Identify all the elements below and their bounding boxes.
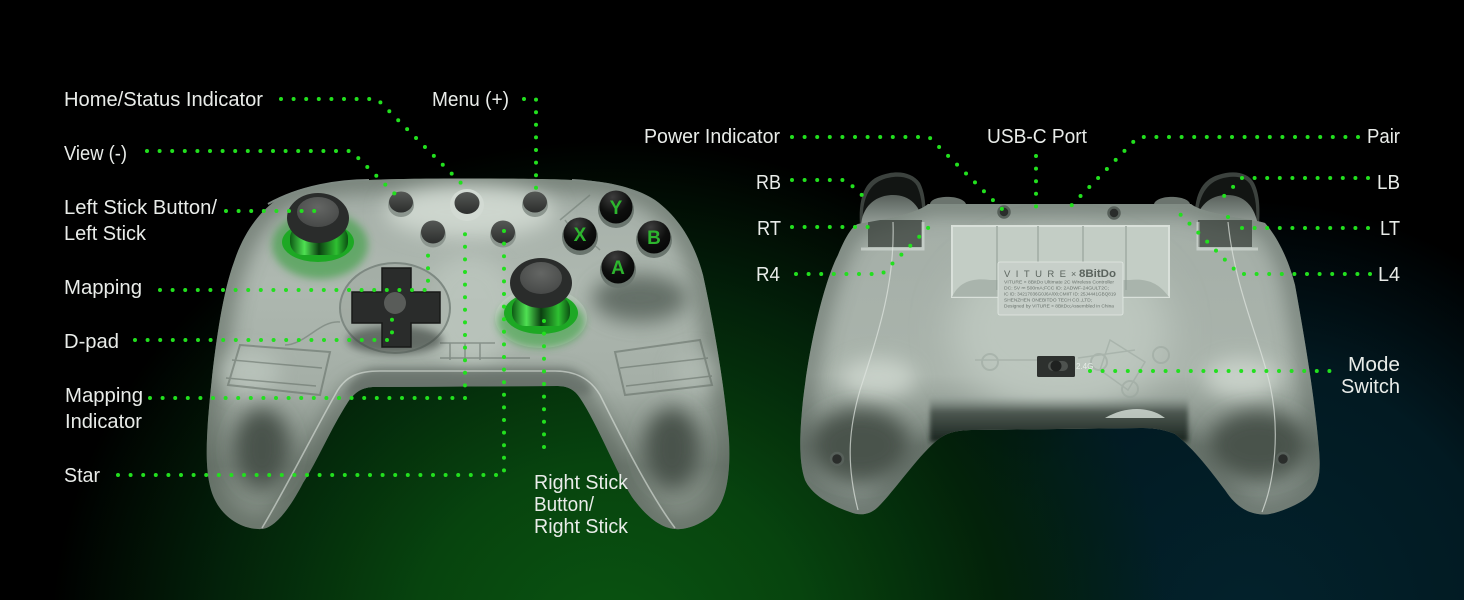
left trigger and bumper [860, 172, 966, 226]
product label: DC: 5V ⎓ 500mA;FCC ID: 2ADWF-24GULT2C; [1004, 286, 1109, 290]
A button [600, 250, 636, 288]
callout: D-pad: D-pad [64, 331, 119, 353]
callout: D-pad [64, 319, 392, 353]
callout: Mapping: Mapping [64, 277, 142, 299]
back view controller [800, 172, 1320, 515]
star button [490, 220, 516, 248]
callout: Mapping Indicator: Indicator [65, 411, 142, 433]
callout: Mapping [64, 246, 428, 299]
callout: USB-C Port: USB-C Port [987, 126, 1087, 148]
callout: Left Stick Button / Left Stick [64, 197, 318, 245]
Y button: Y [610, 198, 623, 219]
mode switch: 2.4G [1076, 362, 1093, 371]
B button: B [647, 228, 661, 249]
product label: × [1071, 269, 1076, 279]
callout: Left Stick Button / Left Stick: Left Stick Button/ [64, 197, 217, 219]
callout: RB: RB [756, 172, 781, 194]
callout: Pair [1065, 126, 1400, 212]
callout: Mode Switch [1090, 354, 1400, 398]
screws [831, 206, 1289, 465]
X button [562, 218, 598, 255]
callout: Mapping Indicator: Mapping [65, 385, 143, 407]
battery compartment [952, 226, 1169, 297]
callout: View (-): View (-) [64, 143, 127, 165]
B button [636, 220, 672, 258]
product label: SHENZHEN ONEBITDO TECH CO.,LTD; [1004, 298, 1092, 302]
view button [388, 192, 414, 217]
callout: LT: LT [1380, 218, 1400, 240]
left stick [272, 193, 368, 279]
callout: Mode Switch: Mode [1348, 354, 1400, 376]
A button: A [611, 258, 625, 279]
callout: L4: L4 [1378, 264, 1400, 286]
callout: L4 [1178, 212, 1400, 286]
callout: Right Stick Button / Right Stick: Button/ [534, 494, 594, 516]
callout: Power Indicator: Power Indicator [644, 126, 780, 148]
callout: Home/Status Indicator: Home/Status Indicator [64, 89, 263, 111]
product label: VITURE [1004, 269, 1066, 280]
callout: Home/Status Indicator [64, 89, 465, 187]
menu button [522, 192, 548, 217]
callout: Right Stick Button / Right Stick [534, 319, 629, 538]
X button: X [574, 225, 587, 246]
callout: LB: LB [1377, 172, 1400, 194]
callout: USB-C Port [987, 126, 1087, 212]
front view controller [207, 178, 729, 529]
product label: IC ID: 34217036G0J6A/00;CMIIT ID: 25J4441GBQ819 [1004, 292, 1116, 296]
callout: Mode Switch: Switch [1341, 376, 1400, 398]
back shell [800, 204, 1320, 515]
callout: Star: Star [64, 465, 100, 487]
product label: Designed by VITURE × 8BitDo;Assembled in China [1004, 304, 1114, 308]
product label [998, 262, 1123, 315]
callout: Left Stick Button / Left Stick: Left Stick [64, 223, 147, 245]
callout: RB [756, 172, 866, 199]
right trigger and bumper [1154, 172, 1259, 226]
callout: Power Indicator [644, 126, 1005, 212]
product label: VITURE × 8BitDo Ultimate 2C Wireless Controller [1004, 280, 1115, 284]
callout: View (-) [64, 143, 398, 197]
callout: Menu (+) [432, 89, 536, 195]
callout: R4 [756, 219, 937, 286]
home button [450, 189, 484, 221]
right stick [495, 258, 587, 348]
front shell [207, 178, 729, 529]
callout: Star [64, 230, 504, 487]
mode switch [1037, 356, 1093, 377]
mapping button [420, 220, 446, 248]
callout: Right Stick Button / Right Stick: Right Stick [534, 472, 629, 494]
product label: 8BitDo [1079, 268, 1116, 280]
Y button [598, 190, 634, 228]
callout: RT: RT [757, 218, 781, 240]
callout: Mapping Indicator [65, 230, 465, 433]
callout: LB [1223, 172, 1400, 219]
callout: Pair: Pair [1367, 126, 1400, 148]
callout: RT [757, 218, 877, 240]
callout: Right Stick Button / Right Stick: Right Stick [534, 516, 629, 538]
D-pad [340, 263, 450, 354]
callout: Menu (+): Menu (+) [432, 89, 509, 111]
callout: R4: R4 [756, 264, 780, 286]
